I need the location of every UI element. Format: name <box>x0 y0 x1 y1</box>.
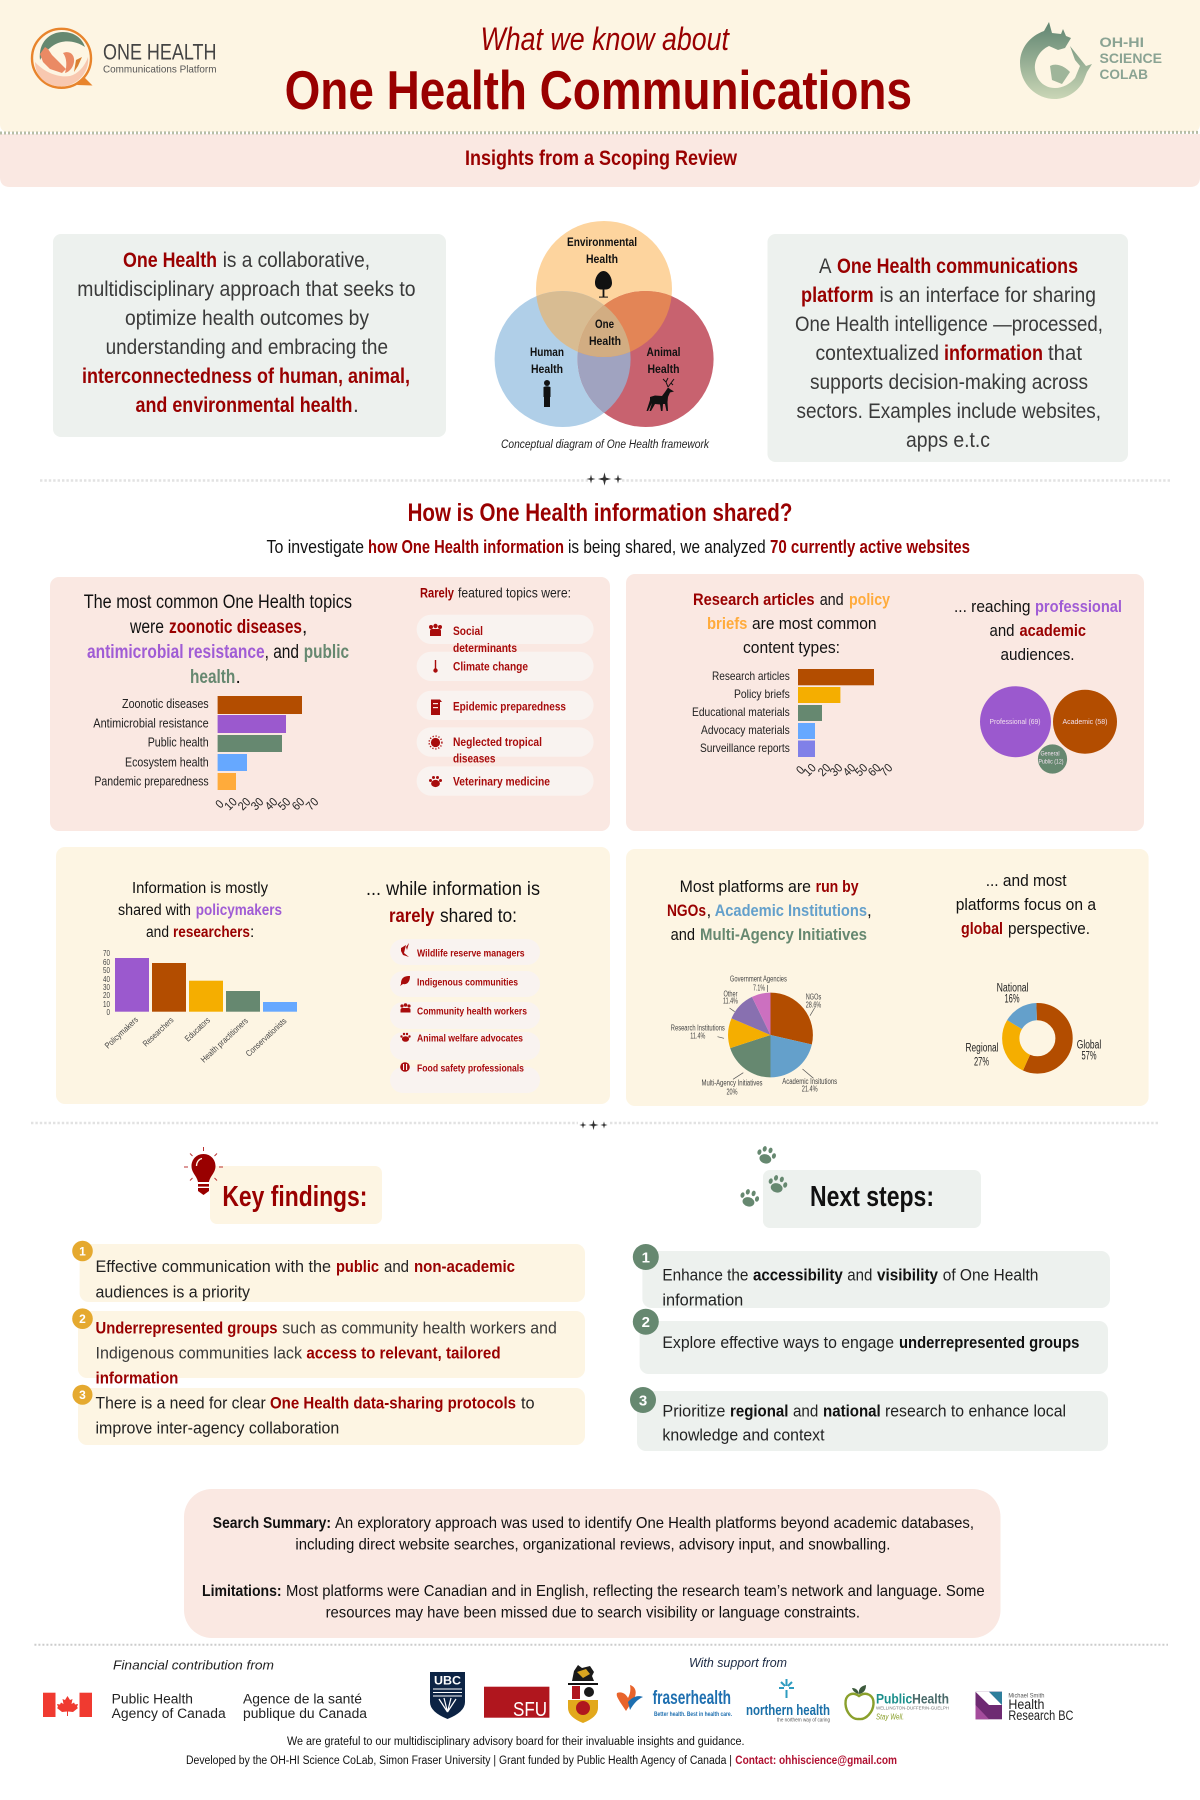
footer: funder <box>43 1658 367 1721</box>
next step 1: accessibility <box>753 1266 843 1284</box>
panel: communications platform definition: One Health communications <box>837 255 1078 278</box>
bar chart: topics: 10 <box>222 795 240 813</box>
title: What we know about <box>480 21 730 57</box>
heading: global perspective: platforms focus on a <box>956 895 1096 914</box>
heading: common topics: , <box>302 617 307 638</box>
pie chart: organisations <box>671 974 837 1096</box>
panel: communications platform definition: contextualized <box>816 342 939 365</box>
heading: run by: run by <box>816 877 859 896</box>
heading: global perspective: perspective. <box>1008 919 1090 938</box>
heading: audiences: ... reaching <box>954 597 1030 616</box>
finding 2: Underrepresented groups <box>96 1318 278 1338</box>
footer: acknowledgement: We are grateful to our multidisciplinary advisory board for their invaluable insights and guidance. <box>287 1736 744 1748</box>
icon: tree <box>595 271 612 298</box>
heading: content types <box>693 590 890 657</box>
pie chart: organisations: Government Agencies <box>730 974 787 984</box>
bar chart: topics: 70 <box>303 795 322 813</box>
heading: audiences <box>954 597 1122 664</box>
panel: next steps <box>630 1145 1110 1451</box>
logo text: ONE HEALTH: ONE HEALTH <box>103 40 216 64</box>
heading: rarely shared to: shared to: <box>440 905 517 927</box>
finding 1: and <box>384 1257 409 1276</box>
heading: run by: and <box>671 925 695 944</box>
panel: content types and audiences <box>626 574 1144 831</box>
heading: audiences: and <box>990 621 1014 640</box>
heading: common topics: antimicrobial resistance <box>87 642 265 663</box>
next step 3: and <box>793 1402 818 1420</box>
panel: communications platform definition: sectors. Examples include websites, <box>796 400 1101 423</box>
bar chart: content types: 70 <box>877 761 896 779</box>
next steps heading <box>763 1170 981 1228</box>
pie chart: organisations: Multi-Agency Initiatives <box>702 1078 762 1088</box>
bar chart: content types: 40 <box>840 761 859 779</box>
bubble chart: audiences <box>980 686 1117 774</box>
bar chart: content types: Advocacy materials <box>701 723 790 737</box>
bar chart: content types: Policy briefs <box>734 687 790 701</box>
heading: common topics: were <box>129 617 164 638</box>
logo: Northern Health: northern health <box>746 1702 830 1719</box>
finding 3 <box>72 1385 585 1445</box>
finding 2: information <box>96 1368 178 1388</box>
caption: Conceptual diagram of One Health framework <box>501 439 710 451</box>
section intro text <box>266 537 970 557</box>
finding 1: audiences is a priority <box>96 1282 250 1302</box>
panel: search summary and limitations: Most platforms were Canadian and in English, reflecting the research team’s network and language. Some <box>286 1583 985 1600</box>
icon: Canadian flag <box>43 1693 92 1717</box>
bar chart: content types: 50 <box>852 761 871 779</box>
bar chart: audiences: Conservationists <box>244 1016 288 1058</box>
heading: common topics: zoonotic diseases <box>169 617 302 638</box>
bar chart: content types: 0 <box>793 763 808 777</box>
label: Environmental Health: Environmental <box>567 235 637 249</box>
icon: person <box>544 380 550 407</box>
label: One Health: One <box>595 317 614 331</box>
rarely featured heading: featured topics were: <box>458 584 571 600</box>
bar chart: topics: 60 <box>289 795 308 813</box>
logo: Public Health WDG: WELLINGTON-DUFFERIN-GUELPH <box>876 1706 949 1710</box>
finding 2: 2 <box>79 1312 86 1326</box>
label: Animal Health <box>646 345 680 376</box>
logo: university crest <box>568 1665 598 1723</box>
heading: global perspective: global <box>961 919 1003 938</box>
logo: Michael Smith Health Research BC: Research BC <box>1008 1708 1074 1723</box>
rarely featured heading: Rarely <box>420 584 454 600</box>
rarely shared list <box>390 939 540 1093</box>
bar chart: topics: Pandemic preparedness <box>94 774 209 788</box>
bar chart: topics: Antimicrobial resistance <box>93 716 209 730</box>
subtitle band <box>0 132 1200 187</box>
panel: search summary and limitations: resources may have been missed due to search visibility or language constraints. <box>326 1604 860 1622</box>
next step 3: Prioritize <box>662 1402 725 1420</box>
logo: Michael Smith Health Research BC: Michael Smith <box>1008 1692 1045 1700</box>
logo: Fraser Health: fraserhealth <box>653 1687 731 1709</box>
bar chart: topics: Ecosystem health <box>125 756 209 770</box>
icon: plate and cutlery <box>400 1062 410 1072</box>
bar chart: content types: 20 <box>815 761 834 779</box>
panel: communications platform definition: apps e.t.c <box>906 429 990 452</box>
finding 2: access to relevant, tailored <box>306 1344 501 1362</box>
footer: supporters: With support from <box>689 1655 787 1670</box>
icon: paw <box>429 776 442 787</box>
section heading: How is One Health information shared: How is One Health information shared? <box>408 499 792 527</box>
bar chart: content types: Research articles <box>712 669 790 683</box>
label: Environmental Health <box>567 235 637 266</box>
panel: communications platform definition: One Health intelligence —processed, <box>795 313 1103 336</box>
heading: run by: Academic Institutions <box>715 901 867 920</box>
bar chart: audiences <box>103 948 297 1064</box>
panel: organisations and geographic focus <box>626 849 1149 1106</box>
heading: content types: policy <box>849 590 890 609</box>
bar chart: content types: Surveillance reports <box>700 741 790 755</box>
next step 1: of One Health <box>943 1266 1038 1284</box>
logo text: OH-HI SCIENCE COLAB: SCIENCE <box>1100 51 1162 66</box>
heading: run by: , <box>867 901 872 920</box>
key findings heading: Key findings: <box>222 1181 367 1213</box>
title: One Health Communications <box>285 59 912 121</box>
heading: common topics: The most common One Health topics <box>84 592 352 613</box>
heading: common topics: . <box>236 667 241 688</box>
pie chart: organisations: 28.6% <box>806 1000 821 1010</box>
icon: paw <box>400 1033 411 1042</box>
finding 3: 3 <box>79 1388 86 1402</box>
logo text: OH-HI SCIENCE COLAB: COLAB <box>1100 67 1148 82</box>
finding 1: 1 <box>79 1244 86 1258</box>
heading: global perspective: ... and most <box>986 871 1067 890</box>
bar chart: audiences: Health practitioners <box>199 1016 250 1064</box>
logo: Public Health WDG: PublicHealth <box>876 1692 949 1706</box>
next step 3: knowledge and context <box>662 1426 825 1444</box>
panel: communications platform definition: A <box>819 255 832 278</box>
footer: funder: publique du Canada <box>243 1706 367 1721</box>
finding 2 <box>72 1308 585 1388</box>
pie chart: organisations: Other <box>724 990 738 998</box>
heading: run by: Multi-Agency Initiatives <box>700 925 867 944</box>
pie chart: organisations: 21.4% <box>802 1084 818 1094</box>
icon: leaf <box>400 976 410 986</box>
bar chart: topics <box>93 696 322 813</box>
bar chart: topics: Public health <box>148 736 209 750</box>
donut chart: geographic focus: National <box>997 983 1029 995</box>
next step 1: Enhance the <box>662 1266 748 1284</box>
panel: communications platform definition: supports decision-making across <box>810 371 1088 394</box>
panel: One Health definition <box>53 234 446 437</box>
heading: content types: briefs <box>707 614 747 633</box>
pie chart: organisations: 20% <box>726 1088 738 1096</box>
logo text: ONE HEALTH: Communications Platform <box>103 64 217 76</box>
pie chart: organisations: 11.4% <box>690 1032 705 1040</box>
bar chart: audiences: 60 <box>103 957 110 967</box>
bar chart: content types: 30 <box>827 761 846 779</box>
donut chart: geographic focus: 27% <box>974 1057 989 1069</box>
venn diagram: One Health framework <box>495 221 714 451</box>
panel: communications platform definition <box>768 234 1128 462</box>
panel: search summary and limitations: including direct website searches, organizational reviews, advisory input, and snowballing. <box>295 1536 890 1554</box>
next step 1: 1 <box>642 1250 650 1266</box>
logo: SFU <box>484 1687 549 1721</box>
icon: light bulb <box>184 1147 223 1195</box>
heading: content types: are most common <box>752 614 876 633</box>
rare topics list: Climate change <box>453 660 528 674</box>
panel: One Health definition: multidisciplinary approach that seeks to <box>77 278 416 301</box>
bar chart: audiences: 10 <box>103 999 110 1009</box>
logo: Fraser Health: Better health. Best in health care. <box>654 1711 732 1718</box>
bar chart: content types: 10 <box>800 761 819 779</box>
heading: content types: and <box>820 590 844 609</box>
logo: Northern Health <box>746 1679 830 1724</box>
label: One Health <box>589 317 621 348</box>
rare topics list: Veterinary medicine <box>453 774 550 788</box>
panel: One Health definition: and environmental health <box>136 394 352 417</box>
footer: supporters <box>430 1655 1074 1724</box>
heading: global perspective <box>956 871 1096 938</box>
icon: bird <box>401 943 409 957</box>
heading: common topics <box>84 592 352 688</box>
panel: communications platform definition: platform <box>801 284 874 307</box>
bar chart: audiences: Researchers <box>141 1015 176 1048</box>
rare topics list: diseases <box>453 752 496 766</box>
rarely shared list: Wildlife reserve managers <box>417 948 525 960</box>
bar chart: content types <box>692 669 896 779</box>
pie chart: organisations: Academic Insitutions <box>782 1077 837 1086</box>
bar chart: audiences: 40 <box>103 974 110 984</box>
logo: Public Health WDG: Stay Well. <box>876 1712 904 1722</box>
finding 1 <box>72 1241 585 1302</box>
label: Human Health <box>530 345 564 376</box>
donut chart: geographic focus: 16% <box>1004 993 1020 1005</box>
next step 1: information <box>662 1290 743 1310</box>
icon: document <box>431 700 442 715</box>
rare topics list: Epidemic preparedness <box>453 700 566 714</box>
next step 1: and <box>847 1266 872 1284</box>
logo text: OH-HI SCIENCE COLAB: OH-HI <box>1100 35 1144 50</box>
rarely featured heading <box>420 584 571 600</box>
bar chart: topics: 0 <box>213 797 227 811</box>
next step 2: Explore effective ways to engage <box>662 1333 894 1352</box>
heading: run by <box>667 877 872 944</box>
title <box>285 21 912 121</box>
heading: audiences: audiences. <box>1000 645 1074 664</box>
bar chart: topics: Zoonotic diseases <box>122 697 209 711</box>
donut chart: geographic focus <box>966 983 1101 1069</box>
panel: search summary and limitations: An exploratory approach was used to identify One Health platforms beyond academic databases, <box>335 1515 974 1532</box>
bubble chart: audiences: General <box>1040 750 1060 758</box>
next step 2 <box>633 1309 1108 1374</box>
label: Human Health: Health <box>531 362 563 376</box>
next step 1 <box>633 1244 1110 1310</box>
next step 2: 2 <box>642 1314 650 1331</box>
finding 3: to <box>521 1394 535 1412</box>
section intro text: is being shared, we analyzed <box>568 537 766 557</box>
donut chart: geographic focus: Global <box>1077 1039 1101 1051</box>
heading: rarely shared to <box>366 878 540 927</box>
heading: common topics: public <box>304 642 349 663</box>
logo: UBC <box>430 1672 465 1719</box>
rare topics list: Social <box>453 624 483 638</box>
next step 3: 3 <box>639 1392 647 1410</box>
heading: mostly shared with: policymakers <box>196 902 282 919</box>
panel: communications platform definition: information <box>944 342 1043 365</box>
next step 3 <box>630 1387 1108 1451</box>
icon: paw prints <box>738 1145 789 1209</box>
logo: UBC: UBC <box>434 1674 461 1688</box>
heading: mostly shared with: researchers <box>173 924 250 941</box>
logo text: OH-HI SCIENCE COLAB <box>1100 35 1162 82</box>
heading: audiences: academic <box>1020 621 1086 640</box>
pie chart: organisations: 11.4% <box>723 996 738 1006</box>
label: Animal Health: Animal <box>646 345 680 359</box>
rare topics list: Neglected tropical <box>453 735 542 749</box>
panel: search summary and limitations: Search Summary: <box>213 1515 331 1532</box>
panel: common topics <box>50 577 610 831</box>
panel: communications platform definition: is an interface for sharing <box>880 284 1096 307</box>
heading: rarely shared to: ... while information is <box>366 878 540 900</box>
next step 3: national <box>823 1402 881 1420</box>
label: Environmental Health: Health <box>586 252 618 266</box>
pie chart: organisations: Research Institutions <box>671 1024 725 1032</box>
next step 2: underrepresented groups <box>899 1333 1079 1352</box>
pie chart: organisations: NGOs <box>806 992 821 1002</box>
footer: funder: Agency of Canada <box>112 1706 226 1721</box>
heading: audiences: professional <box>1035 597 1122 616</box>
header banner <box>0 0 1200 132</box>
rare topics list <box>417 615 594 796</box>
panel: One Health definition: is a collaborative, <box>223 249 370 272</box>
next steps heading: Next steps: <box>810 1181 934 1213</box>
panel: One Health definition: . <box>353 394 359 417</box>
subtitle band: Insights from a Scoping Review <box>465 147 738 170</box>
bar chart: topics: 30 <box>248 795 267 813</box>
bar chart: content types: Educational materials <box>692 705 790 719</box>
next step 3: regional <box>730 1402 788 1420</box>
heading: mostly shared with: : <box>250 924 254 941</box>
pie chart: organisations: 7.1% <box>753 984 765 992</box>
heading: common topics: health <box>190 667 235 688</box>
section intro text: how One Health information <box>368 537 564 557</box>
logo: Northern Health: the northern way of caring <box>777 1718 830 1724</box>
logo: One Health Communications Platform <box>32 29 92 88</box>
bar chart: content types: 60 <box>865 761 884 779</box>
heading: mostly shared with <box>118 880 282 941</box>
heading: run by: , <box>706 901 711 920</box>
panel: search summary and limitations <box>184 1489 1000 1638</box>
donut chart: geographic focus: Regional <box>966 1043 998 1055</box>
bubble chart: audiences: Academic (58) <box>1062 717 1108 726</box>
heading: run by: Most platforms are <box>680 877 811 896</box>
bar chart: topics: 50 <box>275 795 294 813</box>
panel: audiences shared with <box>56 847 610 1104</box>
heading: content types: Research articles <box>693 590 815 609</box>
donut chart: geographic focus: 57% <box>1082 1050 1096 1062</box>
logo: Public Health WDG <box>845 1685 949 1722</box>
bubble chart: audiences: Public (12) <box>1038 758 1064 766</box>
panel: One Health definition: interconnectedness of human, animal, <box>82 365 410 388</box>
next step 3: research to enhance local <box>885 1402 1066 1420</box>
next step 1: visibility <box>877 1266 938 1284</box>
heading: run by: NGOs <box>667 901 706 920</box>
panel: One Health definition: One Health <box>123 249 217 272</box>
footer: credits and contact: Developed by the OH-HI Science CoLab, Simon Fraser University | Grant funded by Public Health Agency of Canada | <box>186 1755 732 1767</box>
rare topics list: determinants <box>453 641 517 655</box>
icon: people <box>400 1003 411 1012</box>
finding 1: Effective communication with the <box>96 1257 331 1276</box>
bar chart: topics: 20 <box>235 795 254 813</box>
footer: funder: Public Health <box>112 1692 193 1706</box>
label: Human Health: Human <box>530 345 564 359</box>
icon: deer <box>646 378 674 411</box>
key findings heading <box>210 1166 382 1224</box>
section intro text: 70 currently active websites <box>770 537 970 557</box>
bar chart: audiences: 30 <box>103 982 110 992</box>
bar chart: audiences: Policymakers <box>103 1015 140 1050</box>
finding 2: Indigenous communities lack <box>96 1344 302 1362</box>
bar chart: audiences: 0 <box>106 1007 110 1017</box>
panel: search summary and limitations: Limitations: <box>202 1583 282 1600</box>
footer: credits and contact: Contact: ohhiscience@gmail.com <box>735 1755 897 1767</box>
footer: funder: Agence de la santé <box>243 1692 362 1706</box>
heading: common topics: , and <box>265 642 299 663</box>
bubble chart: audiences: Professional (69) <box>990 717 1041 726</box>
logo: SFU: SFU <box>513 1699 547 1721</box>
finding 3: There is a need for clear <box>96 1394 266 1412</box>
heading: content types: content types: <box>743 638 840 657</box>
label: One Health: Health <box>589 334 621 348</box>
panel: One Health definition: understanding and embracing the <box>106 336 388 359</box>
heading: mostly shared with: Information is mostly <box>132 880 268 897</box>
footer: funder: Financial contribution from <box>113 1658 274 1672</box>
section intro text: To investigate <box>266 537 364 557</box>
panel: key findings <box>72 1147 585 1445</box>
bar chart: topics: 40 <box>262 795 281 813</box>
label: Animal Health: Health <box>648 362 680 376</box>
logo: Michael Smith Health Research BC: Health <box>1008 1697 1044 1712</box>
icon: people <box>429 624 442 636</box>
heading: rarely shared to: rarely <box>389 905 435 927</box>
rarely shared list: Animal welfare advocates <box>417 1032 523 1044</box>
heading: mostly shared with: shared with <box>118 902 191 919</box>
heading: mostly shared with: and <box>146 924 169 941</box>
finding 3: One Health data-sharing protocols <box>270 1394 516 1412</box>
rarely shared list: Indigenous communities <box>417 976 518 988</box>
panel: communications platform definition: that <box>1048 342 1082 365</box>
finding 1: non-academic <box>414 1257 515 1276</box>
finding 3: improve inter-agency collaboration <box>96 1418 339 1438</box>
finding 1: public <box>336 1257 379 1276</box>
bar chart: audiences: 50 <box>103 965 110 975</box>
rarely shared list: Food safety professionals <box>417 1062 524 1074</box>
logo: Fraser Health <box>617 1685 732 1718</box>
logo: Michael Smith Health Research BC <box>976 1692 1074 1723</box>
finding 2: such as community health workers and <box>282 1318 557 1338</box>
bar chart: audiences: 20 <box>103 990 110 1000</box>
logo text: ONE HEALTH <box>103 40 217 76</box>
icon: thermometer <box>433 660 438 673</box>
logo: OH-HI Science CoLab <box>1020 22 1092 99</box>
panel: One Health definition: optimize health outcomes by <box>125 307 369 330</box>
icon: virus <box>429 736 442 749</box>
bar chart: audiences: Educators <box>183 1015 212 1043</box>
rarely shared list: Community health workers <box>417 1006 527 1018</box>
bar chart: audiences: 70 <box>103 948 110 958</box>
